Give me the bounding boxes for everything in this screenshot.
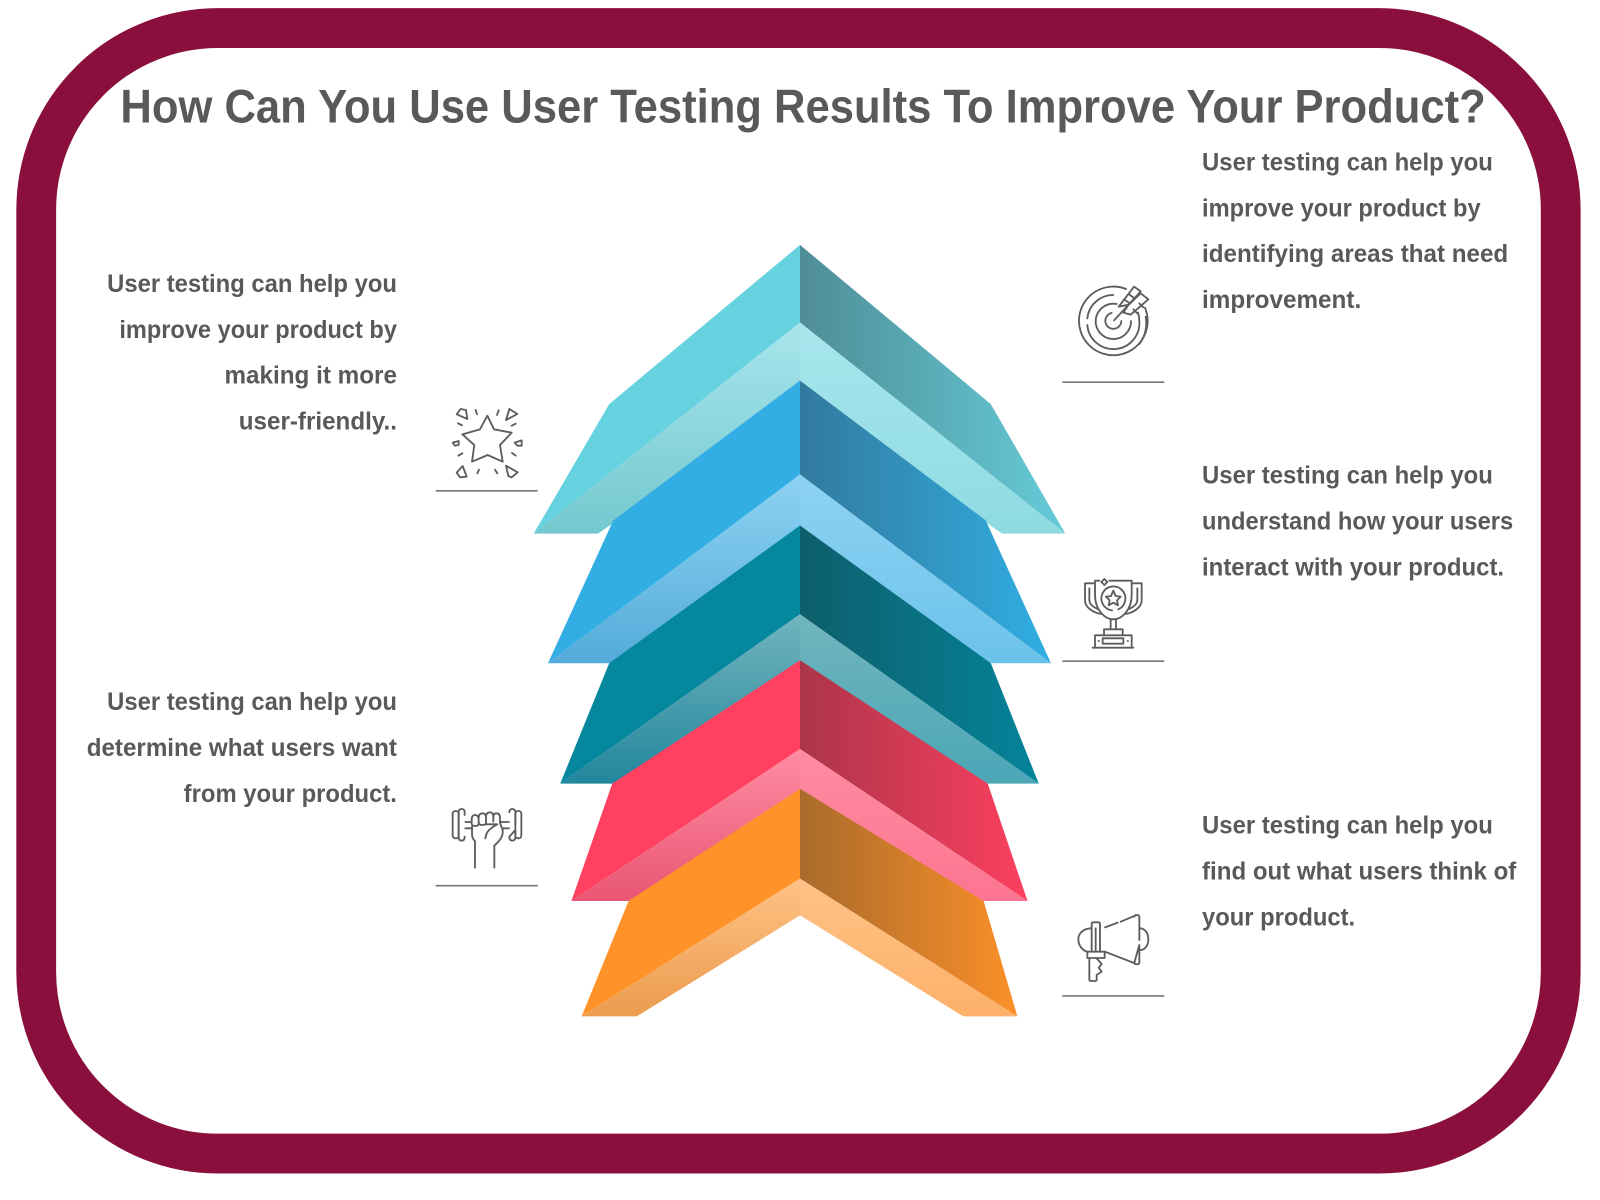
text block: what users think: your product.: [1202, 904, 1355, 932]
arrow layer: red: [571, 660, 1028, 901]
text block: user-friendly: [107, 270, 397, 436]
icon: trophy with star: [1085, 579, 1142, 648]
text block: user-friendly: making it more: [224, 362, 397, 390]
text block: user-friendly: user-friendly..: [239, 408, 397, 436]
arrow layer: dark teal: [560, 526, 1039, 784]
text block: identifying areas: improve your product by: [1202, 194, 1481, 222]
text block: what users want: User testing can help you: [107, 688, 397, 716]
icon: sparkling star: [453, 409, 522, 477]
text block: what users think: find out what users think of: [1202, 858, 1517, 886]
text block: what users think: User testing can help you: [1202, 812, 1493, 840]
divider: star: [436, 490, 538, 492]
text block: what users think: [1202, 812, 1517, 932]
text block: understand users: [1202, 462, 1513, 582]
text block: identifying areas: identifying areas that need: [1202, 240, 1508, 268]
text block: user-friendly: User testing can help you: [107, 270, 397, 298]
text block: user-friendly: improve your product by: [119, 316, 397, 344]
arrow layer: blue: [548, 381, 1051, 663]
text block: identifying areas: User testing can help you: [1202, 148, 1493, 176]
text block: identifying areas: [1202, 148, 1508, 314]
text block: understand users: interact with your product.: [1202, 554, 1504, 582]
divider: trophy: [1062, 660, 1164, 662]
icon: fist with dumbbell: [453, 809, 521, 868]
text block: what users want: determine what users want: [87, 734, 398, 762]
arrow layer: orange: [582, 789, 1017, 1016]
divider: dumbbell: [436, 885, 538, 887]
text block: identifying areas: improvement.: [1202, 286, 1361, 314]
divider: target: [1062, 381, 1164, 383]
text block: understand users: User testing can help you: [1202, 462, 1493, 490]
text block: what users want: [87, 688, 398, 808]
text block: understand users: understand how your users: [1202, 508, 1513, 536]
divider: megaphone: [1062, 995, 1164, 997]
text block: what users want: from your product.: [184, 780, 397, 808]
icon: target with arrow: [1079, 287, 1148, 355]
layered arrow stack: [534, 245, 1065, 1016]
arrow layer: teal: [534, 245, 1065, 534]
icon: megaphone: [1078, 915, 1148, 981]
title: How Can You Use User Testing Results To Improve Your Product?: [120, 80, 1486, 132]
